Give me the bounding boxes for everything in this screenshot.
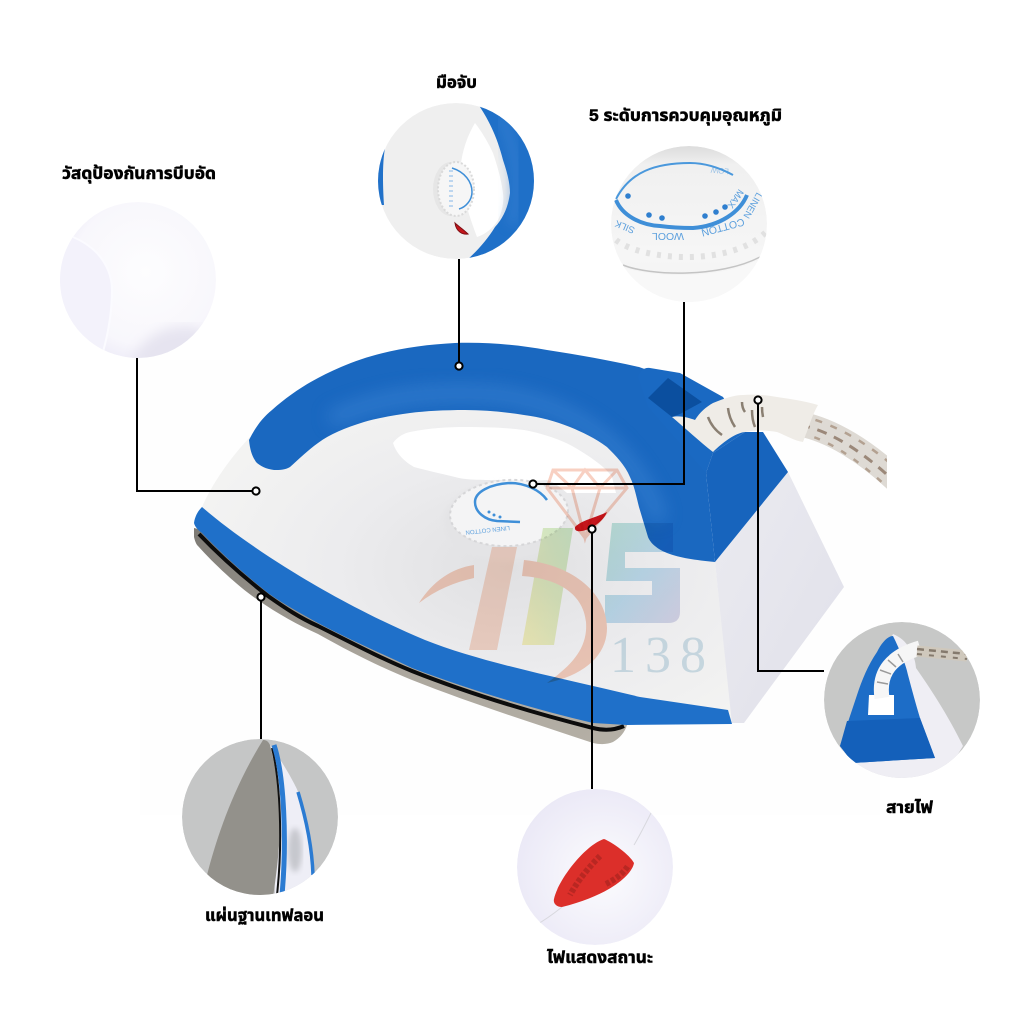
cord strain relief <box>672 395 818 452</box>
label: teflon sole plate: แผ่นฐานเทฟลอน <box>205 905 324 925</box>
power cord <box>804 414 887 488</box>
panel: temperature control dial: LOW <box>710 165 729 176</box>
panel: temperature control dial: LINEN <box>740 190 764 220</box>
white body shell <box>202 400 732 724</box>
connector lines <box>137 259 824 789</box>
blue base band <box>194 507 732 725</box>
temperature dial: LINEN COTTON <box>465 524 510 535</box>
panel: temperature control dial: WOOL <box>652 230 684 242</box>
label: five temperature levels: 5 ระดับการควบคุมอุณหภูมิ <box>589 106 782 126</box>
label: power cord: สายไฟ <box>886 798 934 817</box>
connector dots <box>252 362 762 601</box>
rear white body <box>715 472 844 723</box>
main product image: steam iron <box>194 343 900 744</box>
panel: temperature control dial <box>611 146 767 275</box>
temperature dial <box>443 477 570 560</box>
watermark logo <box>419 470 706 684</box>
panel: indicator light close-up <box>517 789 673 945</box>
panel: temperature control dial: SILK <box>613 217 637 235</box>
panel: teflon sole plate <box>182 739 338 897</box>
background tint behind the iron <box>140 360 880 815</box>
label: anti-compression material: วัสดุป้องกันการบีบอัด <box>62 164 216 184</box>
panel: anti-compression material <box>60 206 212 358</box>
panel: temperature control dial: MAX <box>724 187 745 211</box>
label: handle: มือจับ <box>436 73 477 92</box>
blue handle <box>249 343 723 562</box>
panel: handle <box>378 103 534 259</box>
label: status light: ไฟแสดงสถานะ <box>547 948 653 967</box>
cord slot <box>638 368 788 562</box>
sole plate <box>194 528 627 744</box>
panel: power cord close-up <box>824 622 980 790</box>
hole in handle <box>393 427 616 493</box>
panel: temperature control dial: COTTON <box>700 215 746 238</box>
watermark logo: 138 <box>610 627 706 684</box>
indicator light <box>575 512 607 531</box>
